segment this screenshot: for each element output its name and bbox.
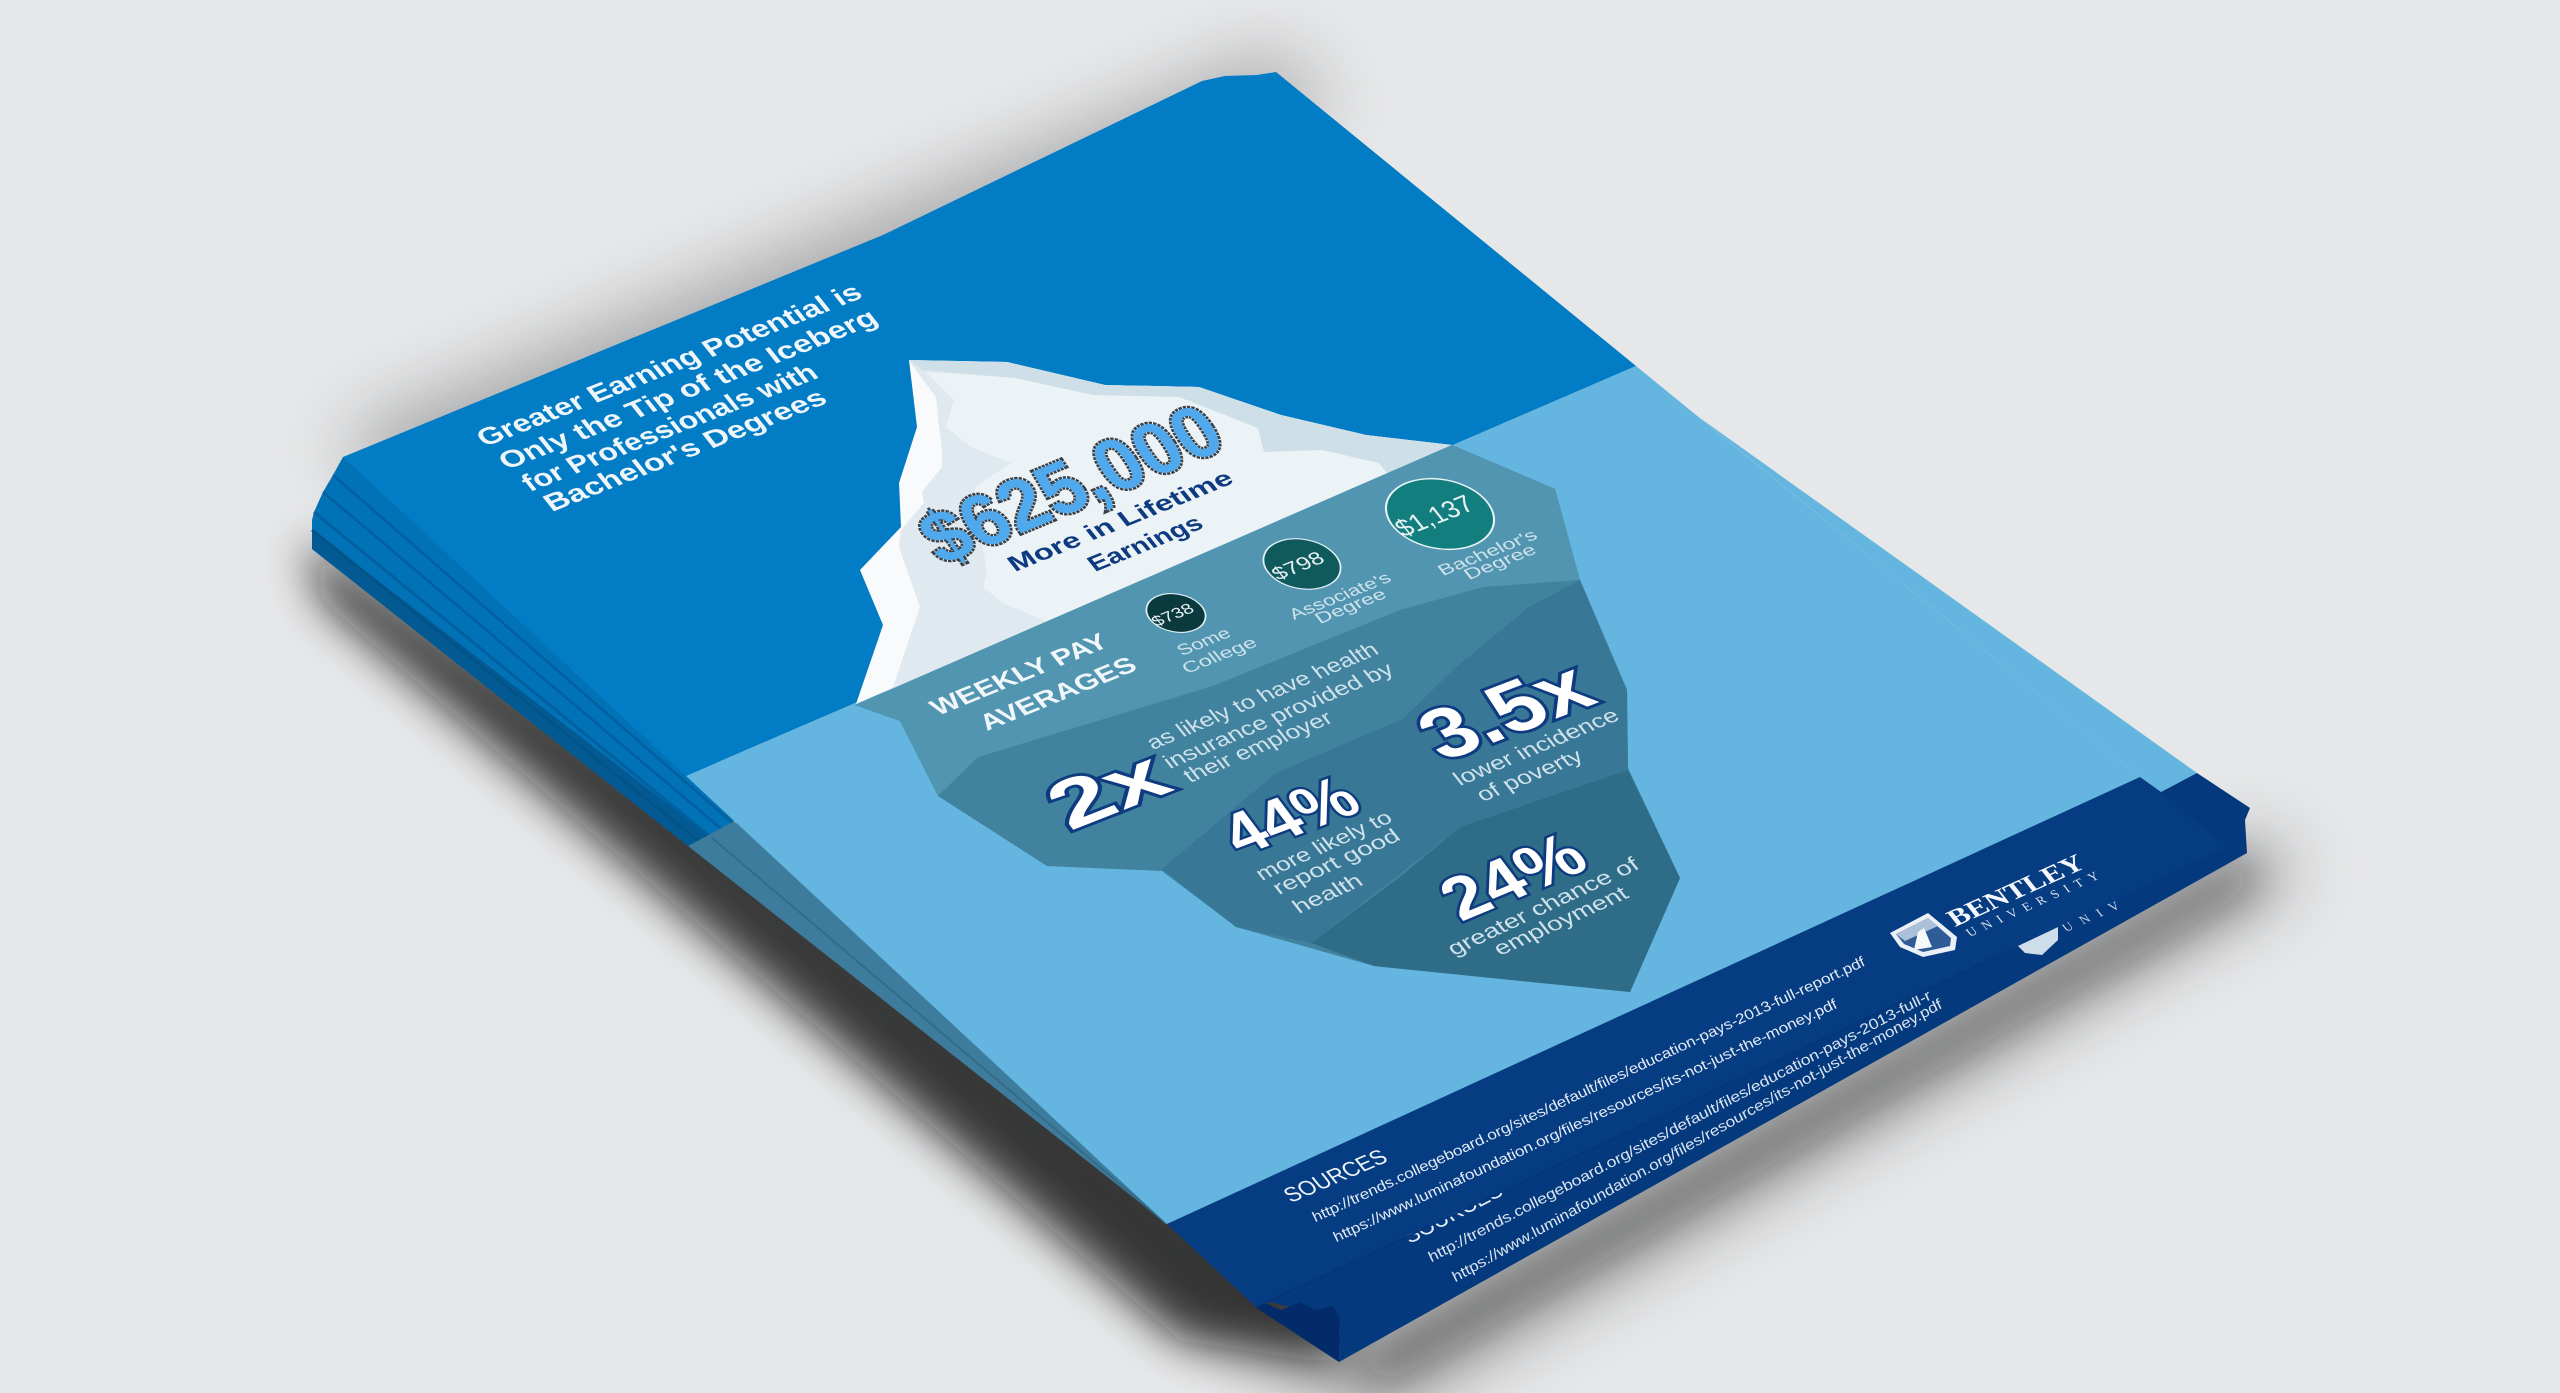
stat: 24% employment: greater chance of bbox=[1442, 853, 1644, 960]
weekly pay: some college: College bbox=[1178, 634, 1261, 677]
wordmark: BENTLEY bbox=[1941, 849, 2091, 932]
flyer top sheet bbox=[343, 72, 2227, 1307]
weekly pay: some college: $738 bbox=[1148, 601, 1198, 630]
stack edge: blue bbox=[312, 457, 760, 846]
stat: 2x health insurance: their employer bbox=[1178, 707, 1338, 787]
footer band bbox=[1167, 777, 2227, 1307]
source link 1: http://trends.collegeboard.org/sites/default/files/education-pays-2013-full-report.pdf bbox=[1308, 954, 1871, 1225]
weekly pay: bachelor's degree: $1,137 bbox=[1389, 490, 1480, 542]
weekly pay heading bbox=[924, 629, 1143, 736]
headline caption bbox=[1002, 466, 1239, 577]
stat: 2x health insurance: as likely to have health bbox=[1141, 638, 1383, 754]
stat: 24% employment: 24% bbox=[1425, 819, 1600, 933]
headline figure: $625,000 bbox=[904, 390, 1239, 580]
weekly pay facet bbox=[855, 445, 1580, 796]
headline caption: More in Lifetime bbox=[1002, 466, 1239, 577]
weekly pay: some college bbox=[1134, 587, 1261, 677]
white rim bbox=[856, 360, 1452, 704]
stat: 44% health: report good bbox=[1268, 825, 1405, 899]
icon: shield bbox=[1890, 913, 1957, 957]
stat: 24% employment: employment bbox=[1488, 882, 1633, 960]
bright centre bbox=[926, 372, 1387, 622]
stat: 3.5x poverty bbox=[1400, 645, 1624, 806]
right facet bbox=[1162, 580, 1628, 943]
weekly pay: associate's degree: Degree bbox=[1311, 585, 1390, 627]
weekly pay: associate's degree bbox=[1248, 530, 1395, 627]
source link 2: https://www.luminafoundation.org/files/resources/its-not-just-the-money.pdf bbox=[1329, 996, 1843, 1245]
stack edge: water bbox=[688, 822, 1180, 1224]
weekly pay heading: WEEKLY PAY bbox=[924, 629, 1114, 721]
sky background bbox=[343, 72, 1636, 776]
weekly pay: associate's degree: Associate's bbox=[1285, 569, 1395, 623]
stat: 44% health: 44% bbox=[1206, 764, 1373, 867]
stat: 3.5x poverty: of poverty bbox=[1471, 745, 1588, 806]
shadows under the flyer stack bbox=[300, 55, 2300, 1393]
water background bbox=[686, 366, 2161, 1224]
stat: 24% employment bbox=[1425, 819, 1644, 960]
wordmark subtitle: UNIVERSITY bbox=[1963, 868, 2103, 939]
sources heading: SOURCES bbox=[1278, 1144, 1392, 1207]
lower sheet logo shield bbox=[2016, 924, 2058, 955]
title: Greater Earning Potential is bbox=[470, 278, 868, 452]
lower sheet source link 1: http://trends.collegeboard.org/sites/default/files/education-pays-2013-full-r bbox=[1424, 988, 1936, 1265]
top right shading bbox=[909, 360, 1452, 473]
lower sheet footer bbox=[1256, 773, 2250, 1362]
stat: 2x health insurance: 2x bbox=[1030, 736, 1186, 844]
stat: 2x health insurance bbox=[1030, 638, 1399, 844]
stat: 44% health bbox=[1206, 764, 1405, 918]
title: Only the Tip of the Iceberg bbox=[492, 304, 884, 475]
title bbox=[470, 278, 884, 517]
stat: 2x health insurance: insurance provided by bbox=[1158, 658, 1399, 773]
stack corner face bbox=[1255, 1302, 1340, 1362]
logo: Bentley University bbox=[1890, 849, 2103, 957]
lower sheet university word: UNIV bbox=[2059, 898, 2123, 934]
weekly pay heading: AVERAGES bbox=[973, 652, 1143, 736]
weekly pay: some college: Some bbox=[1173, 624, 1235, 659]
iceberg above water bbox=[856, 360, 1452, 704]
weekly pay: associate's degree: $798 bbox=[1267, 548, 1329, 585]
lower sheet source link 2: https://www.luminafoundation.org/files/resources/its-not-just-the-money.pdf bbox=[1448, 996, 1948, 1285]
weekly pay: bachelor's degree: Degree bbox=[1460, 541, 1540, 583]
lower sheet sources heading: SOURCES bbox=[1397, 1178, 1508, 1248]
bottom facet bbox=[1311, 770, 1680, 992]
stat: 44% health: more likely to bbox=[1251, 807, 1397, 885]
title: for Professionals with bbox=[515, 358, 824, 497]
stat: 3.5x poverty: lower incidence bbox=[1448, 704, 1624, 790]
top sheet edge bbox=[1256, 950, 2010, 1307]
stat: 44% health: health bbox=[1288, 870, 1368, 918]
weekly pay: bachelor's degree: Bachelor's bbox=[1434, 526, 1541, 579]
headline caption: Earnings bbox=[1082, 511, 1209, 577]
weekly pay: bachelor's degree bbox=[1364, 466, 1541, 583]
title: Bachelor's Degrees bbox=[537, 384, 833, 517]
lower sheet water sliver bbox=[1700, 418, 2197, 792]
iceberg below water bbox=[855, 445, 1680, 992]
grey shading bbox=[880, 361, 1452, 694]
stat: 3.5x poverty: 3.5x bbox=[1400, 645, 1610, 776]
flyer stack: lower sheets bbox=[312, 418, 2250, 1362]
full underwater silhouette bbox=[855, 445, 1680, 992]
